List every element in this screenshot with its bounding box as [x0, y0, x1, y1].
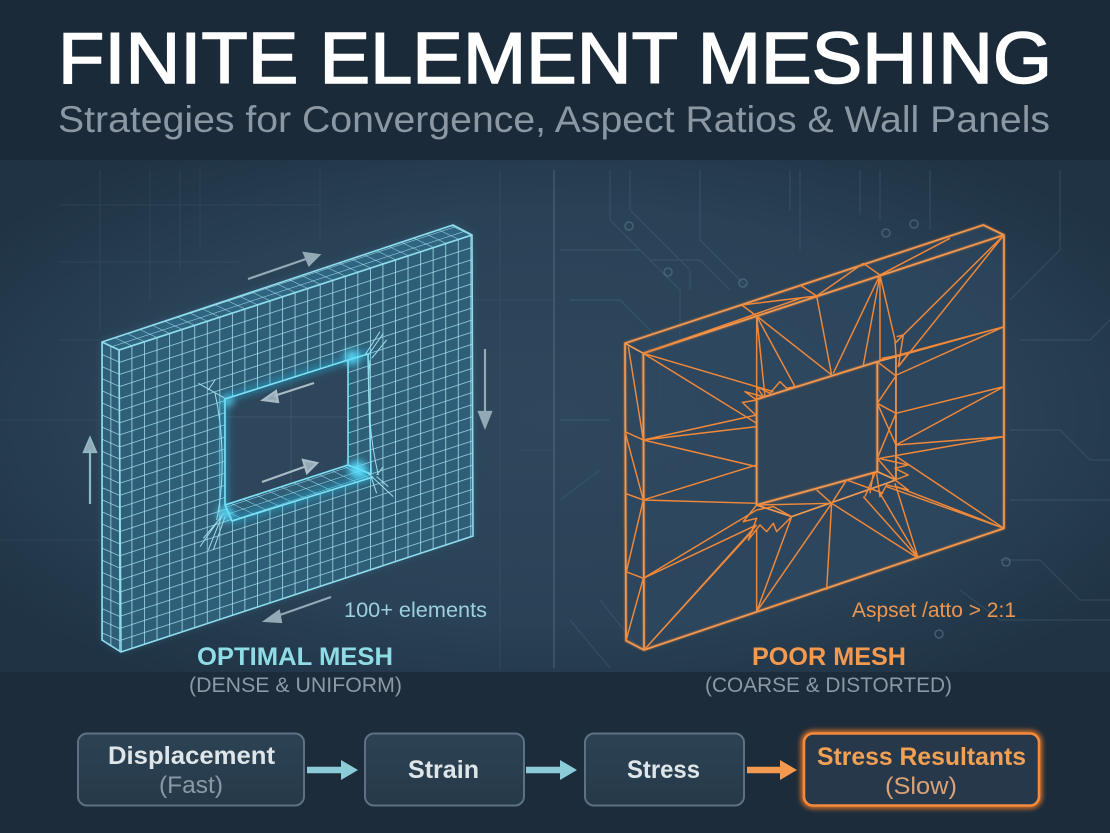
box: displacement — [78, 734, 304, 806]
box: stress — [585, 734, 744, 806]
optimal mesh caption — [189, 643, 402, 697]
wall face tint — [625, 225, 1004, 650]
optimal mesh wall — [102, 225, 473, 652]
window opening — [757, 362, 877, 505]
arrow: stress to resultants — [747, 760, 797, 780]
wall glow — [102, 225, 473, 652]
shear force arrows on optimal mesh — [84, 253, 491, 622]
box: stress resultants: Stress Resultants — [817, 743, 1026, 771]
triangulated wireframe — [625, 225, 1004, 650]
heading: poor mesh: POOR MESH — [752, 643, 906, 671]
top front elements — [757, 235, 1004, 400]
heading: optimal mesh: OPTIMAL MESH — [197, 643, 393, 671]
box: displacement: (Fast) — [159, 772, 223, 799]
arrow: displacement to strain — [307, 760, 358, 780]
annotation: element count: 100+ elements — [344, 599, 487, 622]
subheading: dense and uniform: (DENSE & UNIFORM) — [189, 674, 402, 697]
jagged elements — [742, 335, 908, 416]
right front elements — [880, 327, 1004, 528]
arrow: top — [248, 253, 319, 279]
bright corner highlights — [218, 350, 367, 521]
bottom elements — [757, 473, 918, 612]
arrow: bottom — [265, 597, 331, 622]
box: displacement: Displacement — [108, 742, 276, 770]
window glow — [225, 352, 372, 520]
title: FINITE ELEMENT MESHING — [58, 19, 1052, 99]
subtitle: Strategies for Convergence, Aspect Ratios & Wall Panels — [58, 99, 1050, 140]
window edges — [757, 357, 896, 517]
window crosshair — [225, 376, 348, 490]
outer edges — [625, 225, 1004, 650]
header — [58, 19, 1052, 140]
box: stress resultants: (Slow) — [885, 773, 957, 800]
panel: mesh comparison background — [0, 160, 1110, 672]
poor mesh caption — [705, 643, 952, 697]
arrow: right down — [479, 349, 491, 427]
right reveal elements — [877, 362, 896, 480]
window edges — [225, 354, 373, 521]
poor mesh wall — [625, 225, 1004, 650]
arrow: window top — [263, 383, 314, 402]
box: stress: Stress — [627, 756, 700, 784]
left front elements — [643, 353, 773, 650]
arrow: strain to stress — [526, 760, 577, 780]
left side elements — [625, 347, 643, 641]
workflow: solver speed chain — [78, 734, 1039, 806]
window reveal faces — [225, 354, 373, 521]
box: strain: Strain — [408, 756, 479, 784]
distorted elements at corners — [198, 332, 393, 550]
box: strain — [365, 734, 524, 806]
annotation: aspect ratio: Aspset /atto > 2:1 — [852, 599, 1016, 622]
box: stress resultants — [804, 734, 1039, 806]
top face elements — [643, 238, 950, 353]
subheading: coarse and distorted: (COARSE & DISTORTED) — [705, 674, 952, 697]
arrow: left up — [84, 438, 96, 504]
window opening — [225, 360, 348, 505]
wall faces — [102, 225, 473, 652]
arrow: window bottom — [262, 460, 317, 482]
divider between meshes — [553, 170, 555, 668]
